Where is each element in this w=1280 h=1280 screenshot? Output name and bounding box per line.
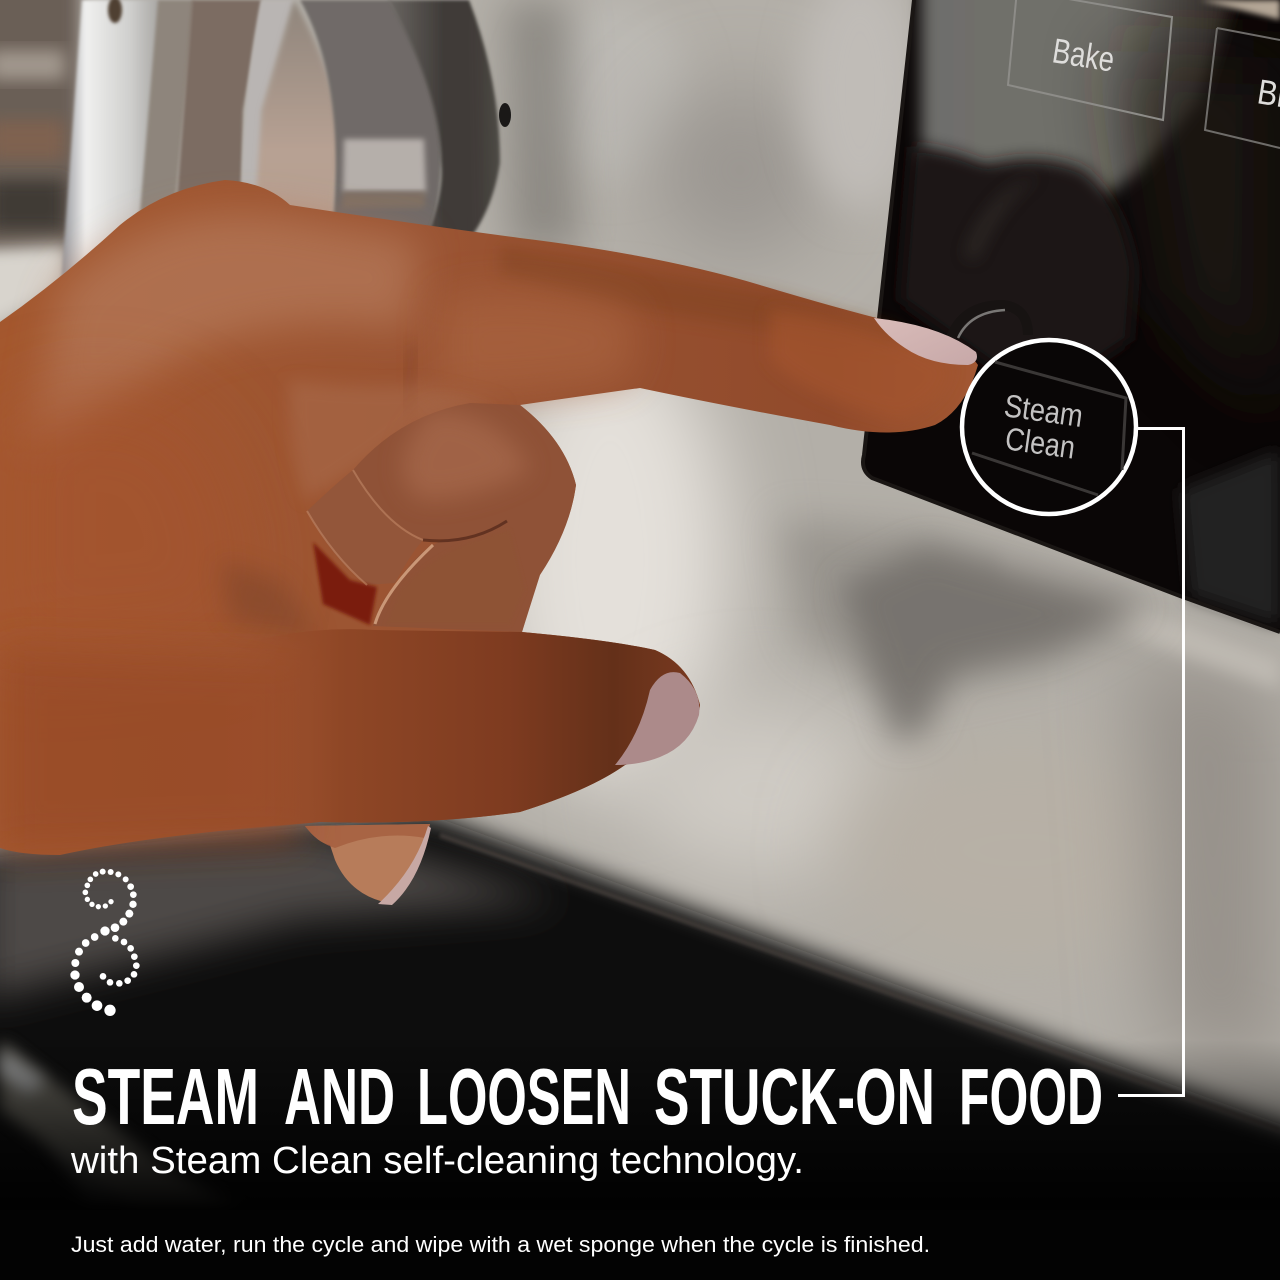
connector line from callout to headline bbox=[1118, 428, 1184, 1096]
lower ring finger tip bbox=[305, 824, 431, 905]
icon: pearl dot swirl logo bbox=[70, 869, 140, 1016]
shading on fingers and palm bbox=[0, 213, 950, 850]
thumb bbox=[220, 629, 700, 832]
oven knob and chrome trim, blurred bbox=[0, 0, 580, 330]
index fingernail bbox=[874, 318, 977, 365]
headline: LOOSEN bbox=[417, 1052, 631, 1141]
control label: Broil button, cropped bbox=[1205, 28, 1280, 148]
headline bbox=[72, 1052, 1103, 1141]
headline: STEAM bbox=[72, 1052, 259, 1141]
main hand shape bbox=[0, 180, 978, 855]
subheading: with Steam Clean self-cleaning technology. bbox=[70, 1140, 804, 1182]
headline: FOOD bbox=[959, 1052, 1103, 1141]
curled fingers bbox=[289, 380, 576, 632]
thumb fingernail bbox=[615, 672, 699, 765]
lower dark oven door area bbox=[0, 815, 1280, 1280]
control label: Bake button bbox=[1008, 0, 1172, 120]
control label: Bake button: Bake bbox=[1050, 31, 1117, 80]
callout label: Steam Clean: Clean bbox=[1003, 420, 1077, 466]
dark control panel bbox=[863, 0, 1280, 632]
headline: STUCK-ON bbox=[654, 1052, 935, 1141]
callout label: Steam Clean: Steam bbox=[1002, 387, 1085, 434]
headline: AND bbox=[284, 1052, 395, 1141]
hand pressing the button bbox=[0, 180, 978, 905]
callout circle magnifying Steam Clean button bbox=[962, 340, 1136, 514]
callout label: Steam Clean bbox=[1002, 387, 1085, 466]
body note: Just add water, run the cycle and wipe with a wet sponge when the cycle is finished. bbox=[71, 1232, 930, 1257]
